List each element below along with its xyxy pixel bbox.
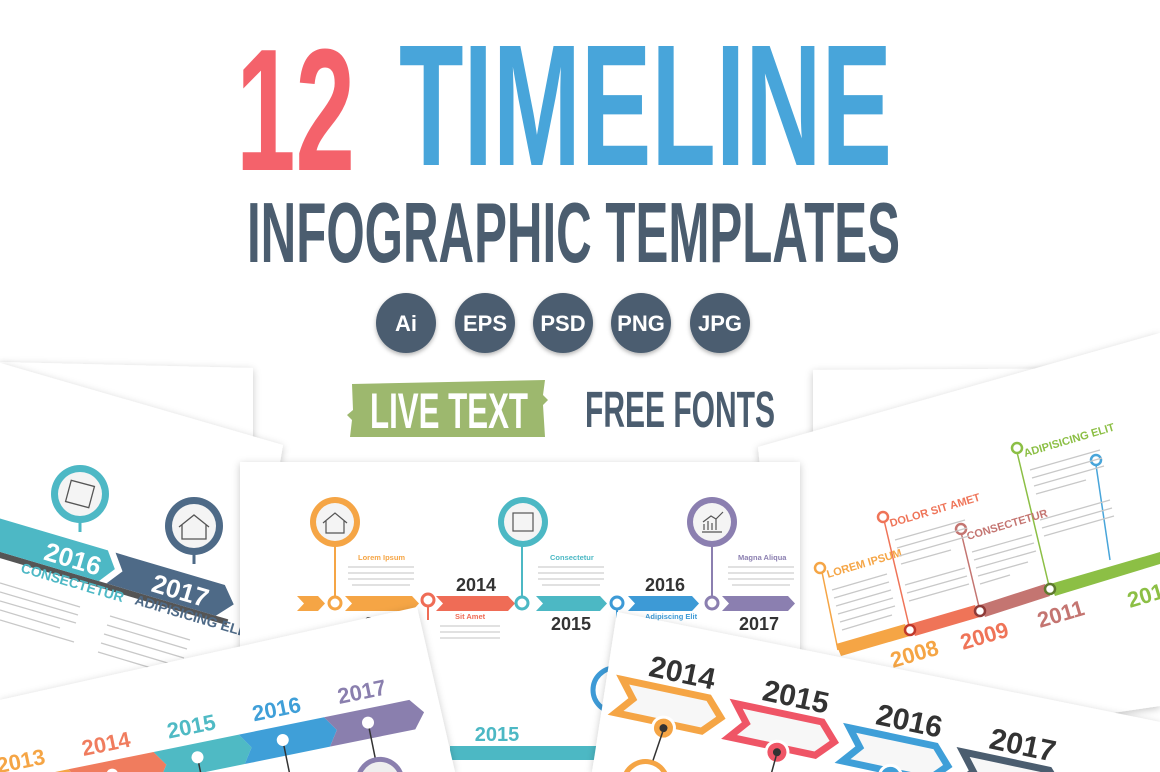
years: 2017 [739, 614, 779, 634]
card: right timeline 2008-2014 [758, 333, 1160, 760]
badge: JPG [690, 293, 750, 353]
years [364, 575, 779, 634]
badge: PNG: PNG [617, 311, 665, 336]
badge: PSD [533, 293, 593, 353]
pin: blue ring [611, 597, 623, 625]
card: center timeline 2013-2017 [240, 462, 800, 772]
badge: EPS [455, 293, 515, 353]
badge: Ai: Ai [395, 311, 417, 336]
years: 2017 [335, 675, 388, 709]
years: 2016 [873, 698, 945, 745]
headings: LOREM IPSUM [825, 547, 903, 581]
partial lower template: 2015 [475, 724, 519, 746]
headings: ADIPISICING ELIT [1022, 422, 1116, 460]
years: 2013 [364, 614, 404, 634]
badge: PSD: PSD [540, 311, 586, 336]
title: 12 TIMELINE: 12 [236, 12, 355, 207]
pin: teal calendar [498, 497, 548, 609]
card: left timeline 2016-2017: ADIPISICING ELIT [133, 592, 253, 641]
years: 2008 [887, 635, 941, 673]
headings [358, 553, 787, 621]
years [0, 675, 388, 772]
headings: Magna Aliqua [738, 553, 787, 562]
text lines [0, 583, 190, 673]
badge: PNG [611, 293, 671, 353]
headings: CONSECTETUR [965, 508, 1049, 543]
headings: Lorem Ipsum [358, 553, 405, 562]
years: 2011 [1034, 595, 1087, 633]
years: 2015 [551, 614, 591, 634]
pin: house [165, 497, 223, 564]
ribbon segments [836, 552, 1160, 656]
headings: Adipiscing Elit [645, 612, 698, 621]
text lines [348, 567, 794, 638]
years [887, 575, 1160, 673]
arrow band [297, 596, 795, 611]
badge: Ai [376, 293, 436, 353]
label: free fonts: FREE FONTS [585, 381, 775, 438]
card: back left [0, 362, 253, 470]
card: back right [813, 368, 1160, 460]
headings: CONSECTETUR [19, 560, 126, 605]
pennants [616, 680, 1065, 772]
years: 2015 [760, 674, 832, 721]
headings: DOLOR SIT AMET [888, 492, 982, 530]
headings: Consectetur [550, 553, 594, 562]
years: 2014 [646, 650, 719, 696]
pin: orange house [310, 497, 360, 609]
card: bottom left ribbon 2013-2017 [0, 607, 455, 772]
pin: calendar [51, 465, 109, 532]
ribbon: 2016 [41, 536, 105, 581]
title: 12 TIMELINE [236, 8, 892, 207]
years: 2014 [456, 575, 496, 595]
headings [825, 422, 1116, 581]
ribbon [0, 698, 427, 772]
pin: purple chart [687, 497, 737, 609]
dots and stems [105, 712, 406, 772]
years: 2016 [645, 575, 685, 595]
years [646, 650, 1059, 769]
text lines [832, 450, 1114, 630]
headings: Sit Amet [455, 612, 486, 621]
badge: live text: LIVE TEXT [370, 383, 528, 439]
years: 2009 [957, 617, 1011, 655]
dots [619, 712, 903, 772]
years: 2017 [987, 723, 1059, 769]
card: bottom right pennants 2014-2017 [592, 612, 1160, 772]
badge: live text [347, 380, 548, 439]
partial lower template [450, 668, 637, 760]
card: left timeline 2016-2017 [0, 363, 283, 720]
ribbon: 2017 [148, 568, 212, 613]
pin: red small [422, 594, 434, 620]
format badges [376, 293, 750, 353]
years: 2016 [250, 692, 303, 726]
pins and stems [815, 443, 1110, 650]
years: 2014 [79, 727, 133, 761]
years: 2015 [165, 709, 218, 744]
ribbon [0, 508, 238, 625]
badge: JPG: JPG [698, 311, 742, 336]
badge: EPS: EPS [463, 311, 507, 336]
